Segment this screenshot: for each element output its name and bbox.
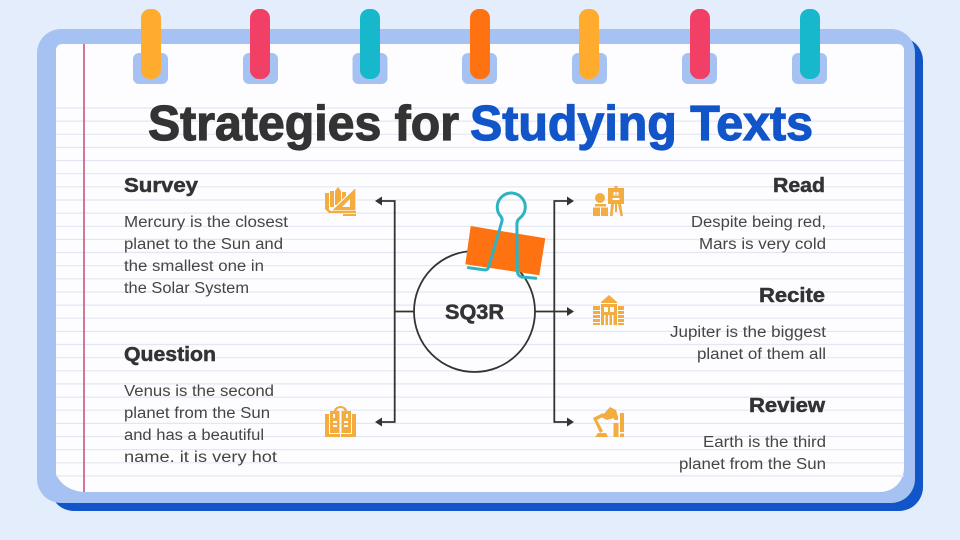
binder clip [465, 193, 545, 278]
text block: survey: planet to the Sun and [124, 236, 283, 253]
text block: recite [670, 285, 827, 363]
text block: survey: the smallest one in [124, 258, 264, 275]
icon: desk lamp and books [593, 407, 624, 437]
text block: recite: Jupiter is the biggest [670, 324, 827, 341]
text block: review: Review [749, 395, 825, 417]
binder rings [133, 9, 827, 84]
connector lines and arrows [375, 196, 574, 426]
title: Studying Texts [470, 97, 813, 151]
text block: question: name. it is very hot [124, 449, 278, 466]
text block: review [679, 395, 826, 473]
text block: read [691, 175, 826, 253]
icon: set square and drawing tools [325, 187, 356, 216]
text block: question [124, 344, 278, 466]
text block: survey: the Solar System [124, 280, 249, 297]
text block: read: Despite being red, [691, 214, 826, 231]
icon: open book [325, 406, 356, 437]
text block: recite: planet of them all [697, 346, 826, 363]
text block: review: Earth is the third [703, 434, 826, 451]
text block: read: Mars is very cold [699, 236, 826, 253]
text block: question: planet from the Sun [124, 405, 270, 422]
icon: teacher at easel [593, 186, 624, 216]
icon: school building [593, 295, 624, 325]
central circle [414, 251, 535, 372]
text block: survey: Survey [124, 175, 199, 197]
text block: survey: Mercury is the closest [124, 214, 289, 231]
text block: recite: Recite [759, 285, 825, 307]
text block: review: planet from the Sun [679, 456, 826, 473]
text block: question: and has a beautiful [124, 427, 264, 444]
text block: survey [124, 175, 289, 297]
text block: question: Venus is the second [124, 383, 274, 400]
title [148, 97, 813, 151]
text block: question: Question [124, 344, 216, 366]
central circle: SQ3R [445, 301, 504, 324]
title: Strategies for [148, 97, 459, 151]
text block: read: Read [773, 175, 825, 197]
